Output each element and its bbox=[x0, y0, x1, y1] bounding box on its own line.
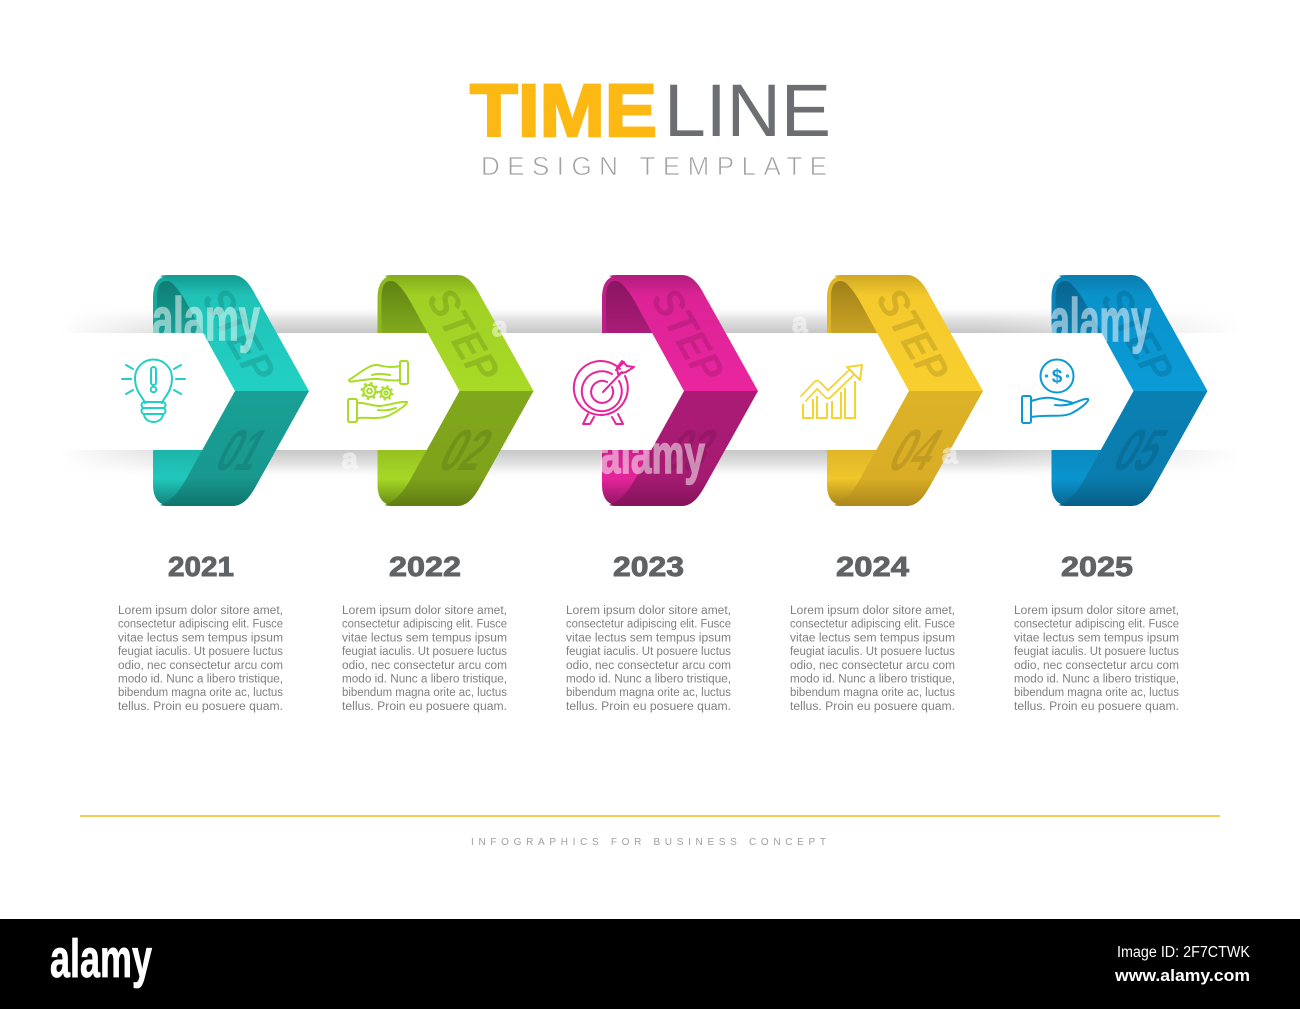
icon: hands with gears bbox=[348, 361, 408, 422]
arrow 4: STEP bbox=[868, 280, 959, 391]
text block 2021: tellus. Proin eu posuere quam. bbox=[118, 701, 283, 713]
year 2023: 2023 bbox=[613, 551, 684, 582]
text block 2021: feugiat iaculis. Ut posuere luctus bbox=[118, 646, 283, 658]
year 2022: 2022 bbox=[389, 551, 461, 582]
year 2021: 2021 bbox=[168, 551, 234, 582]
text block 2023: odio, nec consectetur arcu com bbox=[566, 660, 731, 672]
text block 2021: vitae lectus sem tempus ipsum bbox=[118, 632, 283, 644]
text block 2024: modo id. Nunc a libero tristique, bbox=[790, 674, 955, 686]
text block 2024 bbox=[790, 605, 955, 713]
arrow 3 bbox=[609, 275, 758, 506]
title bbox=[470, 69, 831, 152]
arrow 1: STEP bbox=[194, 280, 285, 391]
stock footer bar: alamy bbox=[50, 929, 152, 989]
text block 2025: vitae lectus sem tempus ipsum bbox=[1014, 632, 1179, 644]
watermark: a bbox=[942, 438, 958, 469]
arrow 5 bbox=[1058, 275, 1208, 506]
text block 2023: Lorem ipsum dolor sitore amet, bbox=[566, 605, 731, 617]
text block 2022: bibendum magna orite ac, luctus bbox=[342, 687, 507, 699]
title: LINE bbox=[664, 69, 831, 152]
text block 2023: consectetur adipiscing elit. Fusce bbox=[566, 619, 731, 631]
arrow 4: 04 bbox=[878, 419, 953, 483]
year 2025: 2025 bbox=[1061, 551, 1133, 582]
arrow 2 bbox=[384, 275, 534, 506]
arrow 5: 05 bbox=[1103, 419, 1177, 483]
icon: hand with coin bbox=[1022, 360, 1088, 423]
subtitle: DESIGN TEMPLATE bbox=[481, 151, 827, 181]
arrow backs bbox=[153, 275, 1114, 506]
watermark: alamy bbox=[152, 286, 260, 353]
text block 2025: odio, nec consectetur arcu com bbox=[1014, 660, 1179, 672]
stock footer bar bbox=[0, 919, 1300, 1009]
watermark bbox=[152, 286, 1151, 485]
text block 2022 bbox=[342, 605, 507, 713]
text block 2021: bibendum magna orite ac, luctus bbox=[118, 687, 283, 699]
arrow 2: 02 bbox=[429, 419, 503, 483]
footer caption: INFOGRAPHICS FOR BUSINESS CONCEPT bbox=[471, 837, 826, 848]
text block 2023: bibendum magna orite ac, luctus bbox=[566, 687, 731, 699]
arrow 1: 01 bbox=[205, 419, 278, 483]
stock footer bar: www.alamy.com bbox=[1114, 966, 1250, 985]
year 2024: 2024 bbox=[836, 551, 909, 582]
text block 2023: tellus. Proin eu posuere quam. bbox=[566, 701, 731, 713]
text block 2022: feugiat iaculis. Ut posuere luctus bbox=[342, 646, 507, 658]
text block 2021 bbox=[118, 605, 283, 713]
title: TIME bbox=[470, 69, 657, 152]
text block 2022: vitae lectus sem tempus ipsum bbox=[342, 632, 507, 644]
stock footer bar: Image ID: 2F7CTWK bbox=[1117, 944, 1251, 961]
white timeline band bbox=[60, 333, 1135, 450]
watermark: a bbox=[492, 311, 508, 342]
text block 2021: odio, nec consectetur arcu com bbox=[118, 660, 283, 672]
text block 2024: odio, nec consectetur arcu com bbox=[790, 660, 955, 672]
text block 2022: consectetur adipiscing elit. Fusce bbox=[342, 619, 507, 631]
text block 2025: bibendum magna orite ac, luctus bbox=[1014, 687, 1179, 699]
watermark: alamy bbox=[1050, 287, 1151, 354]
text block 2025: consectetur adipiscing elit. Fusce bbox=[1014, 619, 1179, 631]
text block 2025: modo id. Nunc a libero tristique, bbox=[1014, 674, 1179, 686]
band shadow bbox=[60, 300, 1240, 485]
text block 2022: Lorem ipsum dolor sitore amet, bbox=[342, 605, 507, 617]
arrow 2: STEP bbox=[418, 280, 509, 391]
text block 2023: vitae lectus sem tempus ipsum bbox=[566, 632, 731, 644]
text block 2023: modo id. Nunc a libero tristique, bbox=[566, 674, 731, 686]
arrow 1 bbox=[160, 275, 309, 506]
arrow 4 bbox=[834, 275, 983, 506]
text block 2021: consectetur adipiscing elit. Fusce bbox=[118, 619, 283, 631]
icon: target bbox=[574, 361, 634, 424]
text block 2022: odio, nec consectetur arcu com bbox=[342, 660, 507, 672]
watermark: alamy bbox=[600, 423, 705, 485]
text block 2025 bbox=[1014, 605, 1179, 713]
icon: light bulb bbox=[122, 360, 185, 422]
icon: growth chart bbox=[803, 365, 862, 418]
text block 2025: tellus. Proin eu posuere quam. bbox=[1014, 701, 1179, 713]
text block 2025: Lorem ipsum dolor sitore amet, bbox=[1014, 605, 1179, 617]
text block 2024: Lorem ipsum dolor sitore amet, bbox=[790, 605, 955, 617]
watermark: a bbox=[342, 443, 358, 474]
text block 2022: modo id. Nunc a libero tristique, bbox=[342, 674, 507, 686]
watermark: a bbox=[792, 307, 808, 338]
text block 2024: vitae lectus sem tempus ipsum bbox=[790, 632, 955, 644]
arrow 3: STEP bbox=[643, 280, 734, 391]
text block 2024: consectetur adipiscing elit. Fusce bbox=[790, 619, 955, 631]
text block 2025: feugiat iaculis. Ut posuere luctus bbox=[1014, 646, 1179, 658]
text block 2022: tellus. Proin eu posuere quam. bbox=[342, 701, 507, 713]
text block 2024: bibendum magna orite ac, luctus bbox=[790, 687, 955, 699]
text block 2023: feugiat iaculis. Ut posuere luctus bbox=[566, 646, 731, 658]
text block 2021: modo id. Nunc a libero tristique, bbox=[118, 674, 283, 686]
arrow 3: 03 bbox=[653, 419, 728, 483]
text block 2021: Lorem ipsum dolor sitore amet, bbox=[118, 605, 283, 617]
text block 2024: tellus. Proin eu posuere quam. bbox=[790, 701, 955, 713]
arrow 5: STEP bbox=[1092, 280, 1183, 391]
text block 2023 bbox=[566, 605, 731, 713]
icon: hand with coin: $ bbox=[1052, 366, 1063, 388]
text block 2024: feugiat iaculis. Ut posuere luctus bbox=[790, 646, 955, 658]
